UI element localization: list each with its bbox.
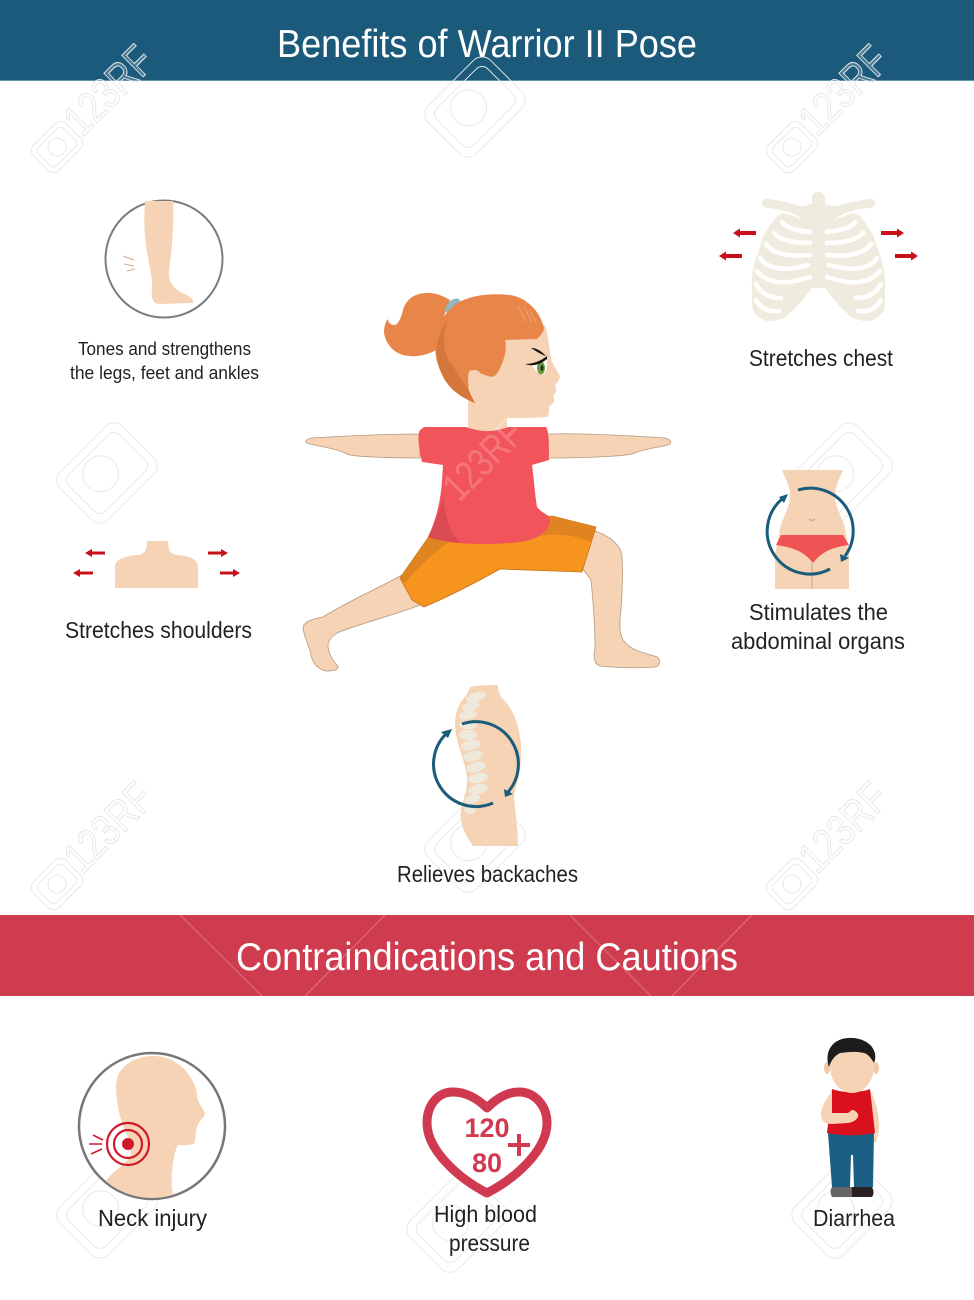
text: 123RF — [54, 36, 163, 145]
central figure: girl in warrior II pose: 123RF — [434, 411, 533, 509]
icon: head with neck pain target — [79, 1053, 225, 1210]
eye — [525, 348, 547, 375]
text: 123RF — [789, 36, 898, 145]
t-shirt — [419, 427, 550, 544]
label: abdomen: Stimulates the — [749, 599, 888, 625]
icon: leg in circle — [106, 200, 222, 318]
label: back: Relieves backaches — [397, 861, 578, 887]
icon: heart with 120/80: 80 — [472, 1148, 502, 1178]
hair — [435, 294, 544, 403]
icon: rib cage with arrows — [719, 192, 918, 321]
title banner — [0, 0, 974, 81]
text: 123RF — [54, 36, 163, 145]
label: diarrhea: Diarrhea — [813, 1205, 895, 1231]
label: legs: Tones and strengthens — [78, 339, 251, 359]
ponytail — [384, 293, 450, 356]
label: abdomen — [731, 599, 905, 654]
ear — [468, 370, 487, 401]
title banner: Benefits of Warrior II Pose — [277, 23, 697, 66]
label: legs: the legs, feet and ankles — [70, 363, 259, 383]
left arm — [306, 434, 420, 458]
text: 123RF — [789, 36, 898, 145]
central figure: girl in warrior II pose — [303, 293, 671, 671]
label: neck injury: Neck injury — [98, 1205, 207, 1231]
label: high blood pressure — [434, 1201, 537, 1256]
icon: spine with circular arrows — [434, 685, 521, 846]
item: back — [397, 685, 578, 887]
back leg — [303, 575, 420, 671]
label: chest: Stretches chest — [749, 345, 894, 371]
neck — [468, 395, 507, 431]
icon: shoulders with arrows — [73, 541, 240, 588]
label: abdomen: abdominal organs — [731, 628, 905, 654]
right arm — [547, 434, 671, 458]
item: chest — [719, 192, 918, 371]
contraindications banner: Contraindications and Cautions — [236, 936, 738, 979]
item: neck injury — [79, 1053, 225, 1231]
item: legs — [70, 200, 259, 383]
icon: boy holding stomach — [821, 1038, 879, 1197]
label: high blood pressure: pressure — [449, 1230, 530, 1256]
label: high blood pressure: High blood — [434, 1201, 537, 1227]
item: shoulders — [65, 541, 252, 643]
text: 123RF — [54, 773, 163, 882]
label: shoulders: Stretches shoulders — [65, 617, 252, 643]
icon: heart with 120/80 — [427, 1092, 547, 1193]
text: 123RF — [789, 773, 898, 882]
front leg — [580, 530, 660, 668]
head — [470, 325, 560, 418]
item: abdomen — [731, 470, 905, 654]
contraindications banner — [0, 915, 974, 996]
item: diarrhea — [813, 1038, 895, 1231]
icon: heart with 120/80: 120 — [464, 1113, 510, 1143]
item: high blood pressure — [427, 1092, 547, 1256]
shorts — [400, 516, 596, 607]
label: legs — [70, 339, 259, 383]
hair tie — [443, 296, 463, 316]
icon: abdomen with circular arrows — [767, 470, 853, 589]
